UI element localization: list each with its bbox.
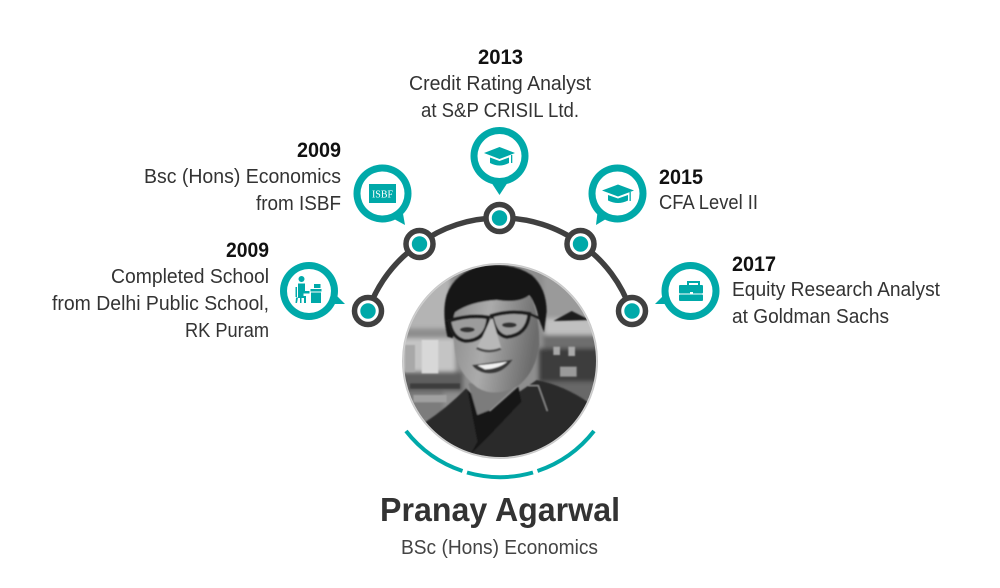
neck: [468, 383, 512, 416]
text: 2009 ISBF: Bsc (Hons) Economics: [144, 166, 341, 188]
icon: ISBF logo: ISBF: [372, 188, 393, 200]
photo background: [400, 262, 600, 462]
jacket: [425, 380, 588, 457]
text: 2009 ISBF: 2009: [297, 139, 341, 162]
text: 2015: 2015: [659, 166, 703, 189]
icon: graduation cap 2015: [588, 164, 646, 225]
text: 2015: CFA Level II: [659, 192, 758, 214]
text: 2017: Equity Research Analyst: [732, 279, 940, 301]
node: 2017: [618, 298, 646, 324]
text: 2009 school: 2009: [226, 239, 269, 262]
text: 2009 school: Completed School: [111, 266, 269, 288]
nose: [478, 318, 502, 350]
node: 2013: [486, 204, 513, 232]
subtitle: BSc (Hons) Economics: [401, 537, 598, 559]
decorative arc under portrait: [406, 431, 594, 477]
text: 2017: [732, 253, 940, 328]
hair: [444, 265, 547, 338]
text: 2009 school: RK Puram: [185, 320, 269, 342]
text: 2009 ISBF: from ISBF: [256, 193, 341, 215]
icon: briefcase: [655, 262, 720, 320]
smile: [472, 360, 513, 373]
node: 2015: [567, 230, 594, 258]
icon: ISBF logo: [354, 164, 412, 225]
icon: school student at desk: [280, 262, 345, 320]
text: 2009 school: [52, 239, 269, 342]
node: 2009 school: [354, 298, 382, 324]
text: 2015: [659, 166, 758, 214]
text: 2009 ISBF: [144, 139, 341, 215]
name heading: Pranay Agarwal: [380, 491, 620, 528]
node: 2009 ISBF: [406, 230, 433, 258]
timeline arc: [368, 218, 631, 311]
text: 2013: at S&P CRISIL Ltd.: [421, 100, 579, 122]
text: 2017: at Goldman Sachs: [732, 306, 889, 328]
icon: graduation cap 2013: [470, 127, 528, 195]
glasses: [446, 312, 539, 341]
portrait photo: [400, 262, 603, 462]
text: 2009 school: from Delhi Public School,: [52, 293, 269, 315]
photo details: [553, 311, 590, 321]
text: 2017: 2017: [732, 253, 776, 276]
text: 2013: 2013: [478, 46, 523, 69]
face: [452, 294, 539, 393]
text: 2013: Credit Rating Analyst: [409, 73, 591, 95]
text: 2013: [409, 46, 591, 122]
